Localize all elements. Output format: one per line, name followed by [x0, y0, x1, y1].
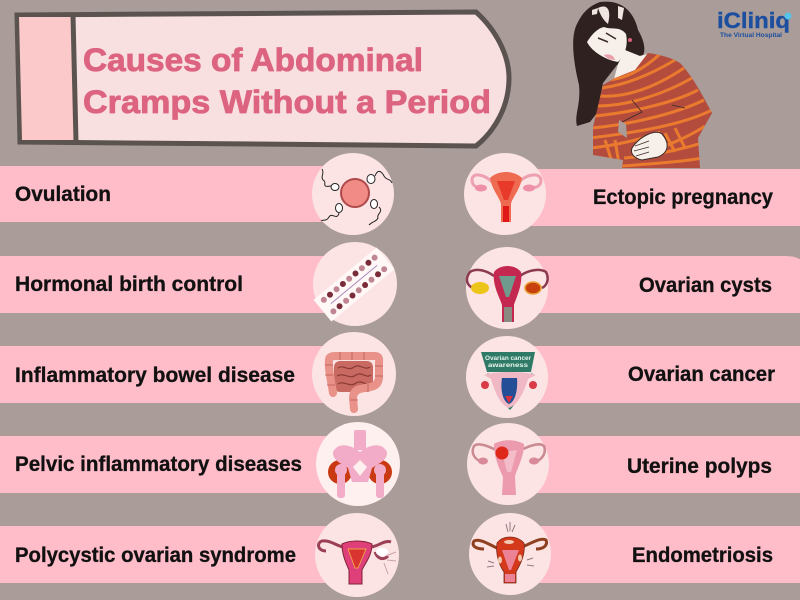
icon: polycystic ovary	[319, 541, 396, 584]
label: ectopic pregnancy: Ectopic pregnancy	[593, 186, 773, 209]
row: inflammatory bowel disease	[0, 332, 396, 416]
label: ovulation: Ovulation	[15, 183, 111, 206]
label: pelvic inflammatory diseases: Pelvic inflammatory diseases	[15, 453, 302, 476]
label: inflammatory bowel disease: Inflammatory bowel disease	[15, 364, 295, 387]
logo: iCliniq: The Virtual Hospital	[720, 32, 782, 39]
illustration: woman with cramps	[573, 2, 712, 170]
row: pelvic inflammatory diseases	[0, 422, 400, 506]
title text: Causes of Abdominal	[83, 42, 423, 78]
label: ovarian cysts: Ovarian cysts	[639, 274, 772, 297]
icon: uterine polyp	[473, 440, 545, 495]
icon: ovarian cysts uterus	[467, 266, 548, 322]
label: ovarian cancer: Ovarian cancer	[628, 363, 775, 386]
row: ovarian cancer	[466, 336, 800, 418]
logo: iCliniq: iCliniq	[717, 8, 790, 33]
icon: ovarian cancer awareness: awareness	[488, 363, 529, 369]
row: uterine polyps	[467, 423, 800, 505]
icon: ectopic uterus	[472, 172, 541, 222]
row: ovarian cysts	[466, 247, 800, 329]
icon: pill pack	[314, 248, 394, 321]
title banner	[17, 12, 509, 146]
icon: ovarian cancer awareness: Ovarian cancer	[485, 356, 532, 362]
icon: endometriosis uterus	[473, 522, 547, 583]
label: hormonal birth control: Hormonal birth control	[15, 273, 243, 296]
row: endometriosis	[469, 513, 800, 595]
label: polycystic ovarian syndrome: Polycystic ovarian syndrome	[15, 544, 296, 567]
row: ovulation	[0, 153, 394, 235]
icon: intestines	[325, 352, 383, 409]
label: endometriosis: Endometriosis	[632, 544, 773, 567]
icon: ovarian cancer awareness	[481, 352, 537, 410]
icon: pelvis	[328, 430, 392, 498]
row: polycystic ovarian syndrome	[0, 513, 399, 597]
row: ectopic pregnancy	[464, 153, 800, 235]
row: hormonal birth control	[0, 242, 397, 326]
title text: Cramps Without a Period	[83, 84, 491, 120]
label: uterine polyps: Uterine polyps	[627, 455, 772, 478]
icon: egg and sperm	[321, 169, 392, 225]
